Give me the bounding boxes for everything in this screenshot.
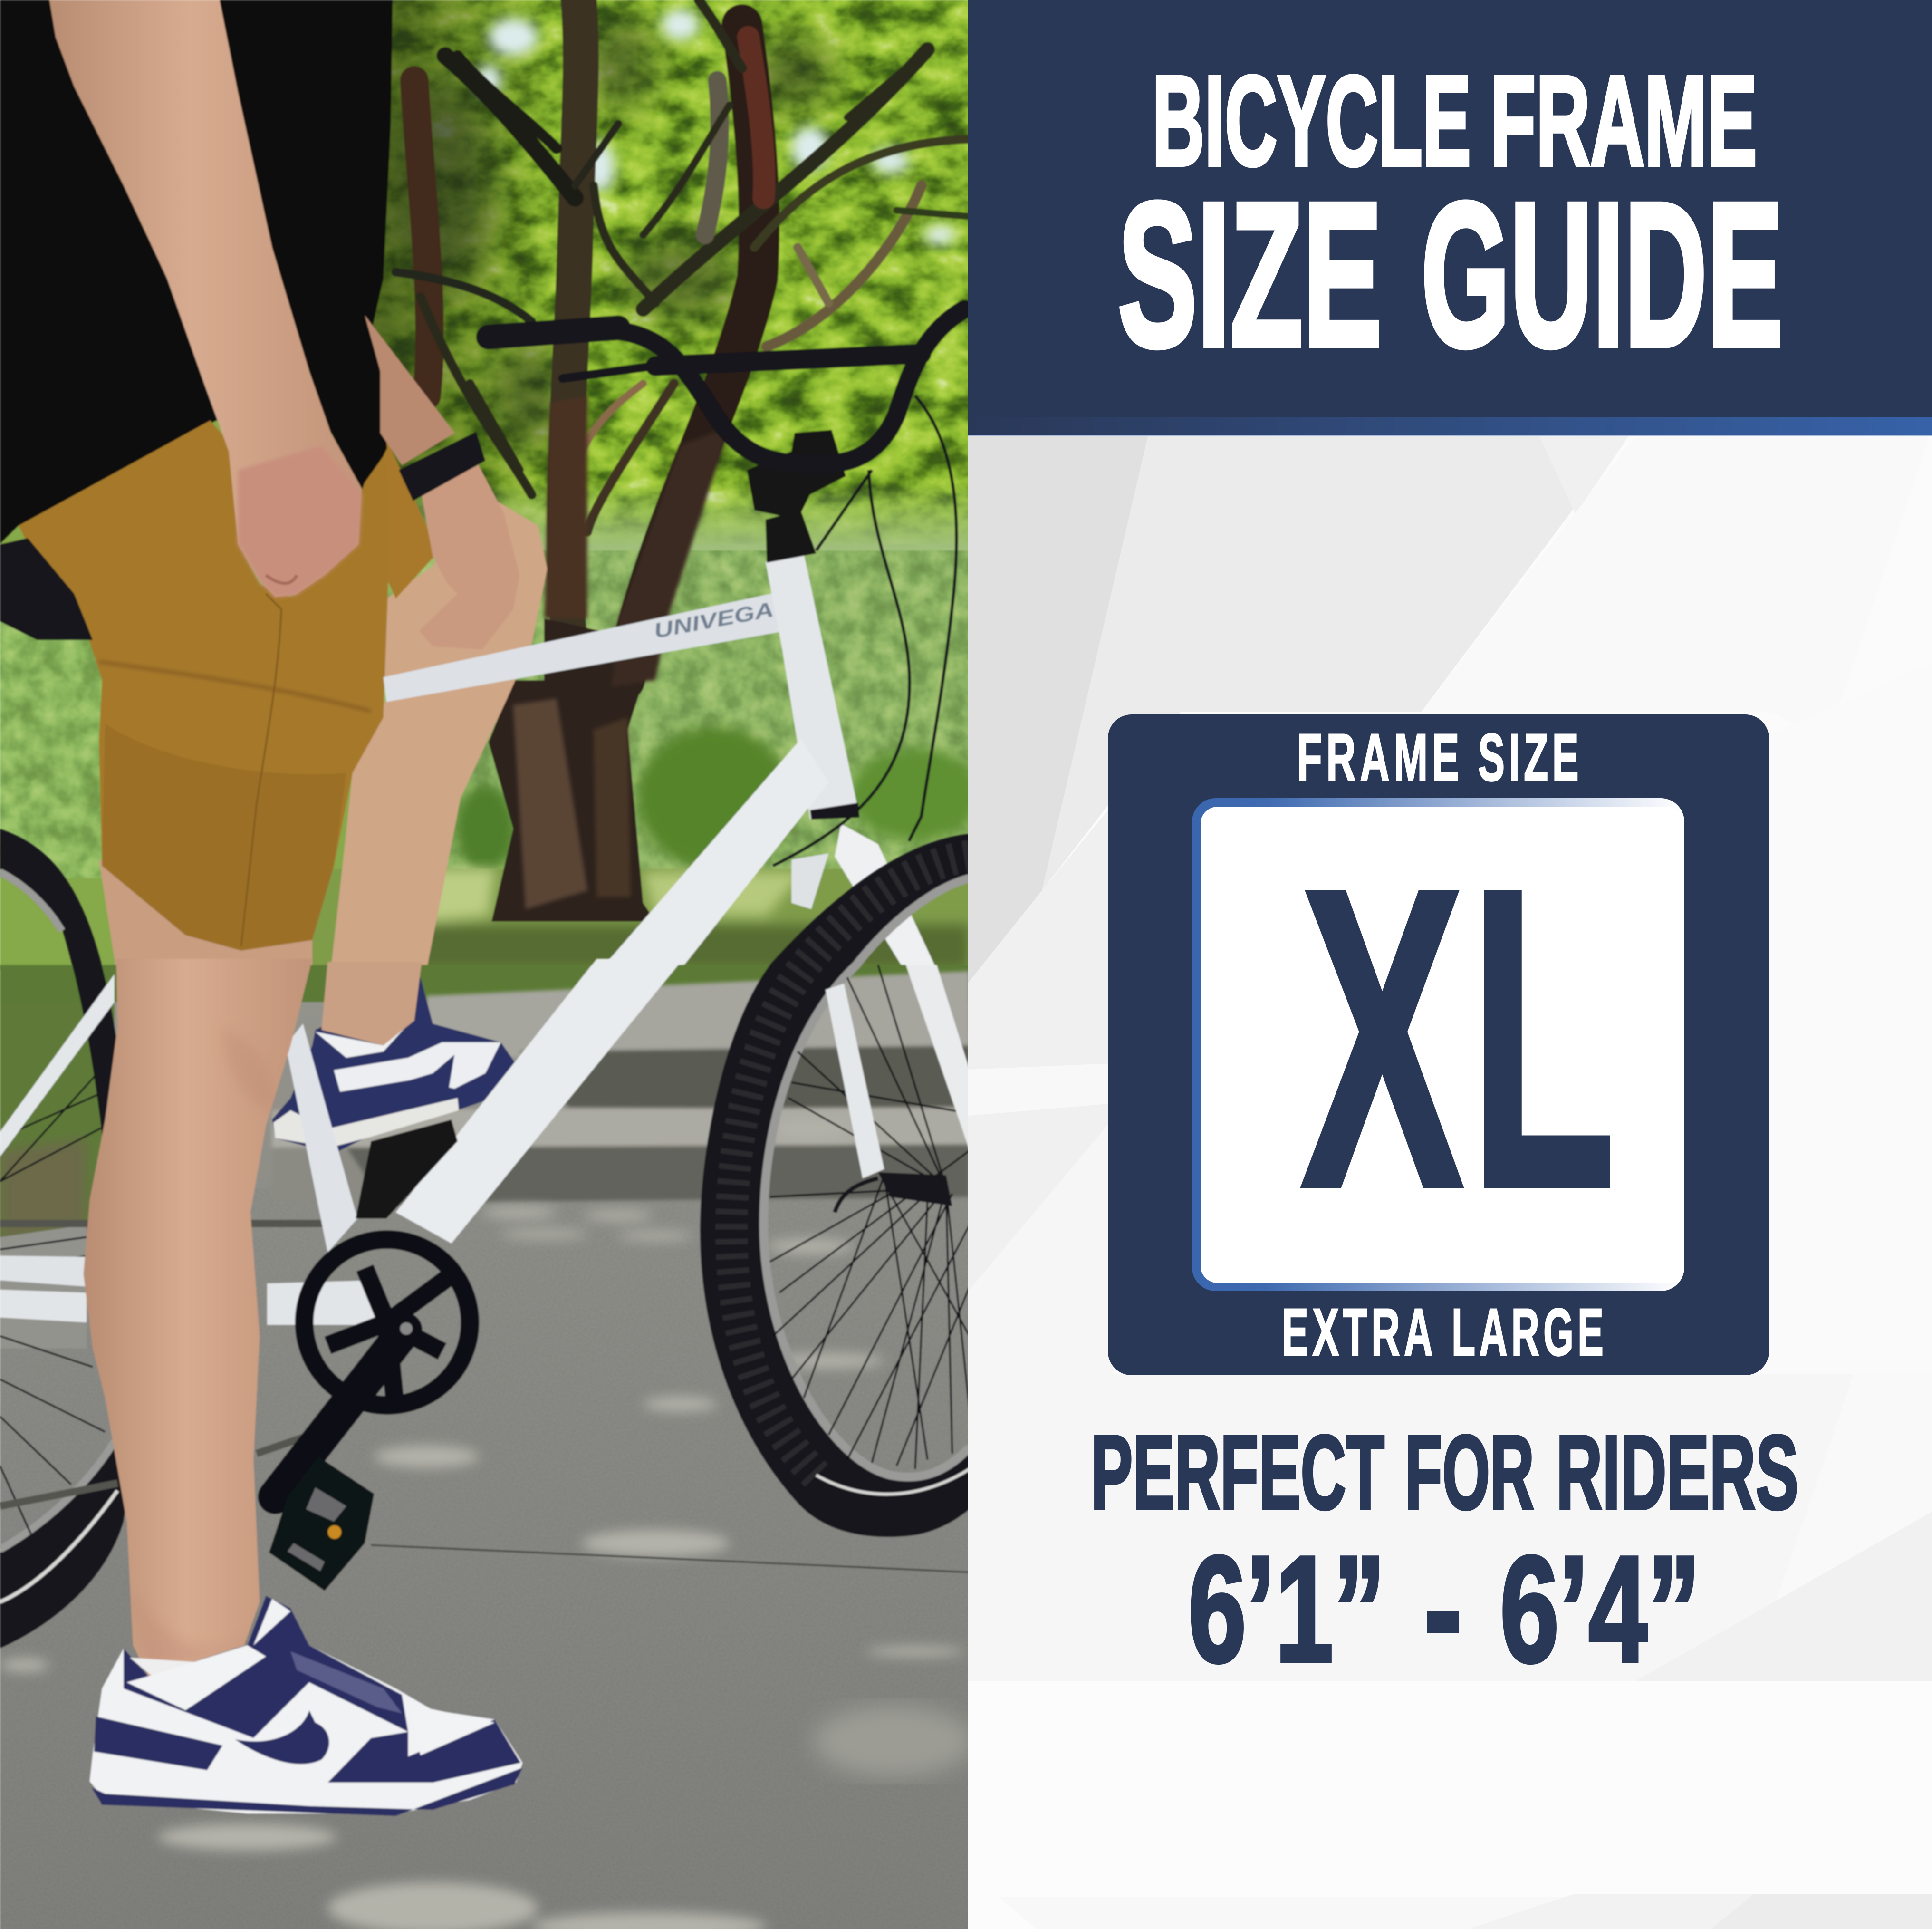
label: extra large: LARGE (1451, 1294, 1607, 1370)
icon: canopy shadow areas (396, 12, 835, 452)
card outer edge with gradient (1192, 798, 1684, 1291)
label: frame size: FRAME (1297, 720, 1463, 795)
icon: pavement steps (272, 971, 970, 1203)
text: rider height range: - (1424, 1525, 1462, 1694)
icon: near hand on knee (419, 461, 519, 649)
text: perfect for riders: PERFECT (1091, 1414, 1384, 1532)
icon: sky gaps in the canopy (476, 10, 955, 244)
icon: rear chain (0, 1224, 346, 1506)
label: extra large: EXTRA (1282, 1294, 1437, 1370)
icon: sunlight patches on pavement (0, 1121, 965, 1929)
size code: XL: X (1301, 801, 1465, 1276)
icon: far forearm (365, 316, 454, 465)
label: frame size: SIZE (1478, 720, 1583, 795)
text: rider height range: 6’1” (1188, 1525, 1385, 1694)
text: frame brand mark: UNIVEGA (652, 598, 776, 643)
panel: frame size badge (1108, 714, 1769, 1375)
icon: shirt (0, 0, 393, 544)
text: perfect for riders: FOR (1405, 1414, 1534, 1532)
card: white size box (1201, 807, 1684, 1283)
panel: right side background (968, 0, 1932, 1929)
text: perfect for riders (1091, 1414, 1798, 1532)
icon: upper crank arm behind frame (356, 1119, 458, 1218)
photo: rider with bicycle (0, 0, 980, 1929)
icon: white frame tubes (0, 959, 683, 1325)
icon: raised shoe (272, 977, 518, 1154)
icon: near leg above knee (99, 859, 312, 971)
icon: far leg (331, 489, 547, 970)
icon: rear wheel (0, 829, 135, 1649)
icon: front wheel (700, 834, 970, 1537)
icon: seat and saddle bag (0, 538, 93, 640)
icon: near arm (49, 0, 362, 597)
icon: main tree trunk (489, 618, 655, 921)
icon: pedal (269, 1456, 374, 1591)
size code: XL: L (1470, 801, 1616, 1276)
icon: near leg (84, 959, 312, 1676)
panel: header band (968, 0, 1932, 436)
icon: frame top tube, head tube, down tube and fork (384, 553, 937, 974)
icon: fork and front hub (826, 965, 970, 1212)
icon: stem and clamp (747, 430, 846, 563)
icon: bushes (454, 727, 980, 872)
heading: size guide (1118, 160, 1783, 389)
icon: brake cables (773, 396, 957, 866)
icon: raised leg (322, 962, 422, 1045)
icon: chainring and crank (275, 1240, 470, 1497)
photo lower half: pavement, legs, wheels, shoes (0, 829, 974, 1929)
icon: planted shoe (90, 1596, 522, 1816)
heading: bicycle frame: FRAME (1490, 49, 1757, 193)
heading: size guide: SIZE (1118, 160, 1382, 389)
icon: shorts (19, 421, 390, 951)
icon: tree trunks and branches (396, 0, 970, 680)
icon: watch (399, 432, 485, 501)
text: rider height range (1188, 1525, 1701, 1694)
photo upper half: trees, rider torso, handlebars (0, 0, 980, 974)
icon: handlebar (489, 309, 965, 464)
text: rider height range: 6’4” (1500, 1525, 1701, 1694)
heading: bicycle frame: BICYCLE (1152, 49, 1471, 193)
icon: far shorts leg (371, 433, 434, 598)
